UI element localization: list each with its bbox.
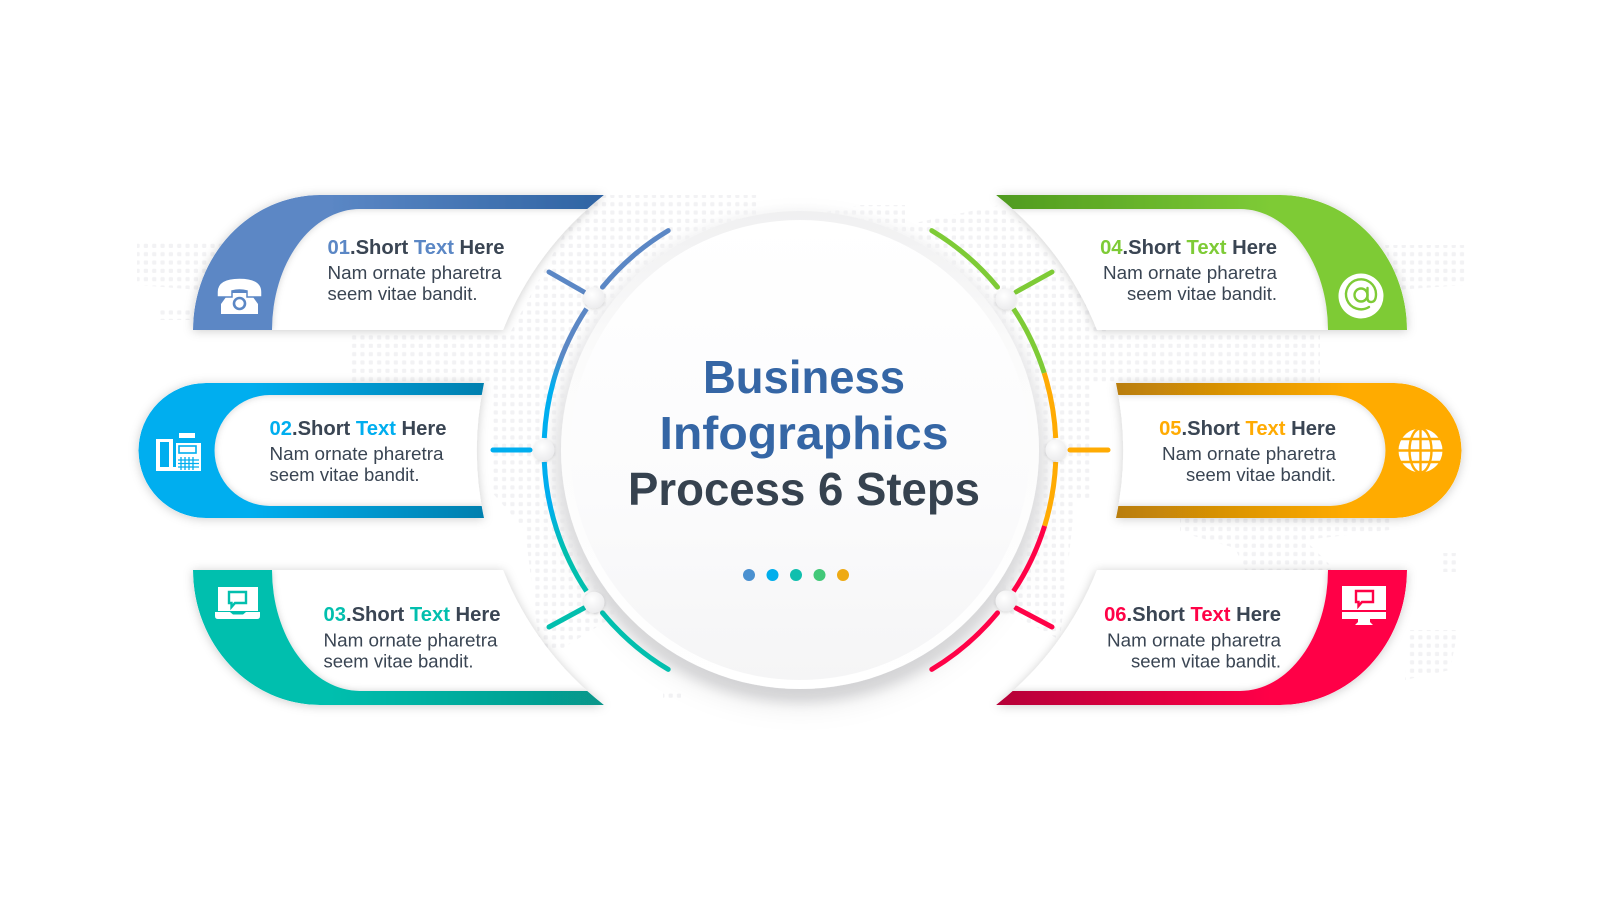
title — [628, 351, 980, 515]
step body line 1: Nam ornate pharetra — [328, 263, 502, 284]
orange upper arc — [1044, 373, 1056, 438]
step body line 2: seem vitae bandit. — [270, 465, 420, 486]
dotted world map background — [137, 195, 1465, 699]
card background — [1116, 383, 1462, 518]
icon: fax machine — [156, 433, 201, 471]
icon: globe — [1398, 428, 1443, 473]
spur 05 — [1070, 448, 1108, 452]
red upper arc — [1014, 526, 1045, 591]
spur 04 — [1016, 272, 1052, 292]
icon: telephone — [217, 278, 262, 314]
coloured band — [193, 570, 604, 705]
central circle — [553, 209, 1047, 703]
title line 1: Business — [703, 351, 905, 403]
node 05 — [1046, 440, 1066, 460]
step heading: 06.Short Text Here — [1104, 604, 1281, 626]
green upper arc — [932, 231, 998, 287]
spur 01 — [549, 272, 584, 292]
infographic — [134, 192, 1466, 710]
halo shadow — [553, 209, 1047, 703]
coloured band — [996, 570, 1407, 705]
step body line 2: seem vitae bandit. — [328, 284, 478, 305]
step body line 2: seem vitae bandit. — [1186, 465, 1336, 486]
step body line 1: Nam ornate pharetra — [1107, 630, 1281, 652]
title line 3: Process 6 Steps — [628, 463, 980, 515]
card background — [996, 570, 1407, 705]
panel: step 04 — [996, 195, 1407, 330]
step heading: 03.Short Text Here — [324, 604, 500, 626]
coloured band — [193, 195, 604, 330]
segmented coloured ring — [544, 231, 1056, 669]
step body line 1: Nam ornate pharetra — [1103, 263, 1277, 284]
coloured band — [996, 195, 1407, 330]
panel: step 01 — [193, 195, 604, 330]
title line 2: Infographics — [660, 407, 948, 459]
spur 02 — [493, 448, 530, 452]
orange lower arc — [1045, 462, 1056, 526]
coloured band — [1114, 383, 1462, 518]
red lower arc — [932, 613, 998, 669]
node 02 — [534, 440, 554, 460]
cyan to teal arc — [544, 462, 586, 591]
panel: step 06 — [996, 570, 1407, 705]
green lower arc — [1014, 309, 1044, 373]
spur 06 — [1016, 608, 1052, 627]
card background — [193, 195, 604, 330]
card background — [193, 570, 604, 705]
node 01 — [584, 287, 604, 308]
icon: laptop with speech bubble — [215, 587, 260, 619]
step body line 2: seem vitae bandit. — [1131, 652, 1281, 672]
inner disc — [570, 220, 1030, 680]
white disc — [561, 211, 1039, 689]
node 04 — [996, 288, 1016, 310]
panel: step 02 — [138, 383, 486, 518]
node 06 — [996, 590, 1016, 612]
card background — [996, 195, 1407, 330]
step heading: 05.Short Text Here — [1159, 418, 1336, 440]
spur 03 — [549, 608, 584, 627]
blue arc — [602, 231, 668, 287]
step body line 1: Nam ornate pharetra — [324, 630, 498, 652]
coloured band — [138, 383, 486, 518]
step body line 1: Nam ornate pharetra — [270, 444, 444, 465]
connector spurs — [493, 272, 1108, 627]
panel: step 05 — [1114, 383, 1462, 518]
step body line 2: seem vitae bandit. — [1127, 284, 1277, 305]
step heading: 02.Short Text Here — [270, 418, 446, 440]
step body line 1: Nam ornate pharetra — [1162, 444, 1336, 465]
icon: at sign — [1338, 274, 1384, 318]
blue to cyan arc — [544, 309, 586, 438]
panel: step 03 — [193, 570, 604, 705]
teal arc — [602, 613, 668, 669]
decorative colour dots — [743, 569, 849, 581]
step heading: 04.Short Text Here — [1100, 237, 1277, 259]
step heading: 01.Short Text Here — [328, 237, 504, 259]
node 03 — [584, 592, 604, 613]
ring nodes — [534, 287, 1066, 613]
icon: desktop monitor with speech bubble — [1342, 586, 1386, 625]
step body line 2: seem vitae bandit. — [324, 652, 474, 672]
card background — [138, 383, 484, 518]
